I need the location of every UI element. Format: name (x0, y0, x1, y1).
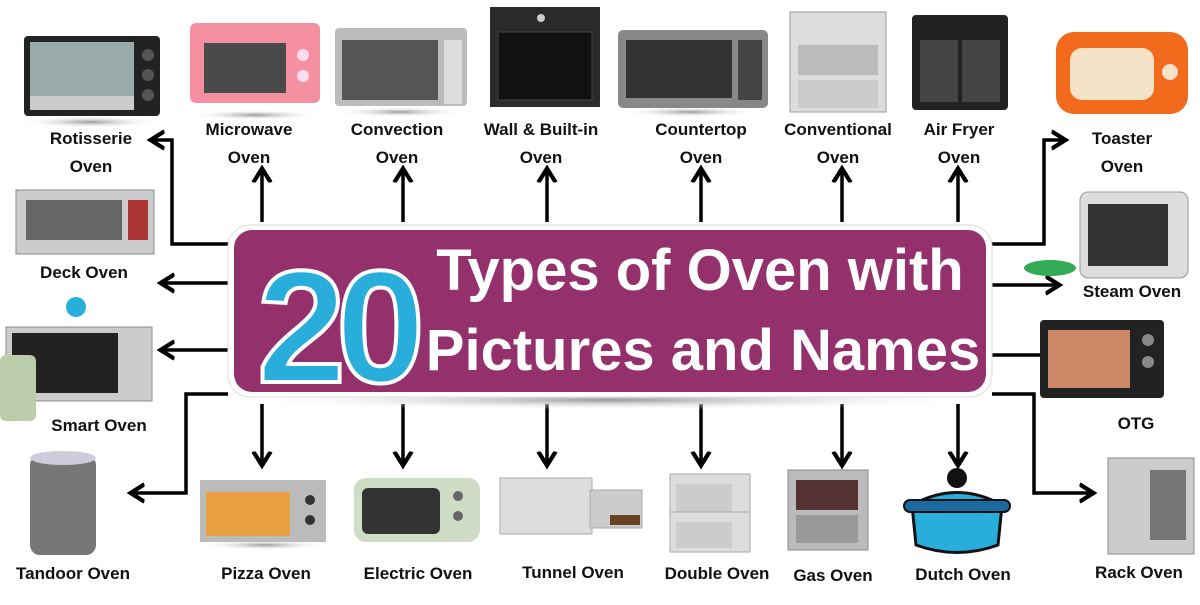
labels (16, 120, 1183, 585)
labels: Double Oven (665, 564, 769, 583)
oven: toaster (1056, 32, 1188, 114)
oven: convection (335, 28, 467, 117)
labels: Oven (1101, 157, 1143, 176)
oven: air fryer (912, 15, 1008, 110)
oven: double (670, 474, 750, 552)
oven: OTG (1040, 320, 1164, 398)
oven: tandoor (30, 451, 96, 555)
labels: Rotisserie (50, 129, 132, 148)
title panel (228, 225, 992, 416)
labels: Gas Oven (793, 566, 873, 585)
arrows (134, 140, 1090, 493)
labels: Oven (817, 148, 859, 167)
labels: Steam Oven (1083, 282, 1181, 301)
labels: Electric Oven (364, 564, 472, 583)
oven: tunnel (500, 478, 642, 534)
labels: Toaster (1092, 129, 1152, 148)
big number 20: 20 (257, 237, 419, 416)
labels: Oven (70, 157, 112, 176)
labels: Countertop (655, 120, 747, 139)
labels: Pizza Oven (221, 564, 311, 583)
labels: Dutch Oven (915, 565, 1011, 584)
labels: Conventional (784, 120, 892, 139)
title panel: Pictures and Names (426, 318, 980, 383)
labels: Oven (938, 148, 980, 167)
oven: conventional (790, 12, 886, 112)
title text: Types of Oven with (436, 238, 964, 303)
labels: OTG (1118, 414, 1154, 433)
labels: Convection (351, 120, 443, 139)
labels: Rack Oven (1095, 563, 1183, 582)
labels: Smart Oven (51, 416, 147, 435)
labels: Oven (520, 148, 562, 167)
oven: steam (1024, 192, 1188, 278)
labels: Wall & Built-in (484, 120, 598, 139)
labels: Air Fryer (924, 120, 995, 139)
oven: dutch (904, 468, 1010, 552)
labels: Oven (680, 148, 722, 167)
oven: pizza (200, 480, 330, 550)
labels: Microwave (206, 120, 292, 139)
oven: smart (0, 297, 152, 421)
oven: microwave (190, 23, 320, 120)
labels: Tunnel Oven (522, 563, 624, 582)
labels: Tandoor Oven (16, 564, 130, 583)
labels: Oven (228, 148, 270, 167)
oven: deck (16, 190, 154, 254)
oven: wall built-in (490, 7, 600, 107)
oven: electric (354, 478, 480, 542)
oven: rotisserie (20, 36, 160, 128)
oven: rack (1108, 458, 1194, 554)
labels: Deck Oven (40, 263, 128, 282)
labels: Oven (376, 148, 418, 167)
oven: countertop (618, 30, 768, 117)
oven: gas (788, 470, 868, 550)
